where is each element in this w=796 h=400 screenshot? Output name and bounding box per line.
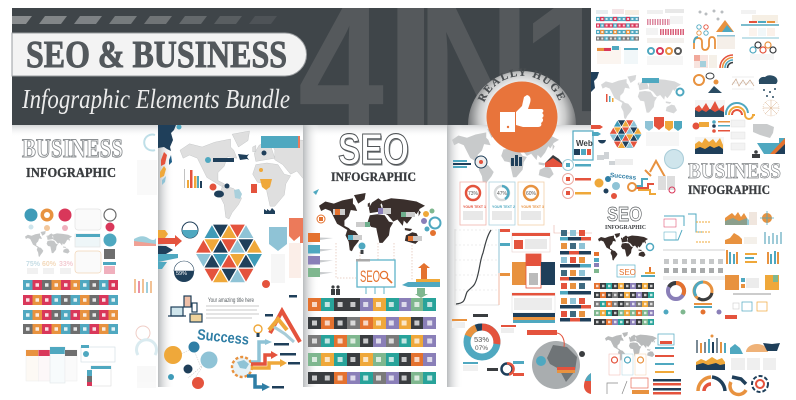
area chart xyxy=(696,357,725,370)
panel: right bottom right thumbnail xyxy=(696,334,780,395)
heading: INFOGRAPHIC: INFOGRAPHIC xyxy=(331,169,416,184)
thumb icon xyxy=(500,95,544,132)
donut labels xyxy=(452,314,516,371)
panel: faded edge of second sheet xyxy=(134,134,157,388)
process chips xyxy=(725,293,771,319)
panel: right thumbnail strip top xyxy=(596,9,779,68)
devices xyxy=(597,152,633,165)
factory icon xyxy=(264,208,275,214)
panel: right process thumbnails xyxy=(663,211,782,319)
donut chart: 53% xyxy=(474,335,489,344)
donut pair xyxy=(668,282,712,300)
note box xyxy=(81,345,115,362)
SEO sign board: SEO xyxy=(360,267,380,286)
network xyxy=(594,176,620,199)
heading: BUSINESS: BUSINESS xyxy=(688,158,781,183)
icon tile grid xyxy=(594,283,654,325)
world map xyxy=(180,130,303,220)
colour arrows xyxy=(402,263,440,298)
panel: map and hexagon sheet xyxy=(158,125,303,391)
icon strip rows xyxy=(23,280,118,334)
process diagram xyxy=(664,214,710,242)
globe with arrows xyxy=(232,339,300,391)
list icons xyxy=(655,347,674,373)
triangle arrows xyxy=(265,295,300,342)
gear cluster xyxy=(646,244,654,250)
icon columns xyxy=(560,230,591,322)
web box xyxy=(573,131,593,160)
donut legend xyxy=(664,303,722,314)
red corner globe xyxy=(584,373,591,394)
people silhouettes xyxy=(331,285,340,295)
panel: header banner xyxy=(12,8,591,125)
rainbow arc xyxy=(726,103,755,119)
thumb 1 icon rows xyxy=(596,9,639,64)
web box xyxy=(658,334,674,345)
ring caption path xyxy=(483,76,561,107)
arrow cluster xyxy=(628,179,656,194)
stacked bar chart xyxy=(695,100,725,117)
gear cluster xyxy=(421,208,440,236)
hexagon of triangles xyxy=(195,224,263,283)
round badges xyxy=(174,222,198,282)
line chart xyxy=(455,229,510,305)
flow and tiles xyxy=(607,378,681,394)
area chart xyxy=(695,137,724,154)
subtitle: Infographic Elements Bundle xyxy=(21,84,290,114)
big 4IN1 text xyxy=(300,8,591,125)
bar chart xyxy=(184,169,202,188)
percent stats: 60% xyxy=(42,261,57,268)
globe icons xyxy=(24,208,72,231)
banner drop shadow xyxy=(12,125,591,137)
map pin callouts xyxy=(205,136,300,199)
ring on map xyxy=(676,88,684,96)
map pins xyxy=(313,189,366,254)
area chart second row xyxy=(725,232,782,244)
badge: really huge thumbs up xyxy=(468,68,576,152)
heading: Success: Success xyxy=(196,326,250,349)
ring stat cards: YOUR TEXT 1 xyxy=(463,205,486,209)
ring stat cards: 60% xyxy=(526,191,537,197)
SEO sign: SEO xyxy=(619,268,636,277)
banner background xyxy=(12,8,591,125)
panel: charts sheet xyxy=(447,125,593,394)
arrows xyxy=(591,125,606,144)
donut chart xyxy=(467,327,497,357)
badge ring xyxy=(468,71,576,125)
ring stat cards: YOUR TEXT 3 xyxy=(521,205,544,209)
option tiles xyxy=(725,275,779,290)
body text lines xyxy=(206,305,259,319)
heading: INFOGRAPHIC: INFOGRAPHIC xyxy=(26,165,116,180)
semi-circle infographics xyxy=(730,343,780,370)
thumb 3 curves xyxy=(694,10,735,68)
panel: right thumbnail map and hexagon copy xyxy=(591,72,684,199)
grey map xyxy=(452,127,559,186)
top row icons xyxy=(694,73,777,98)
left arrows xyxy=(158,230,182,269)
mini table xyxy=(87,366,111,386)
dark map xyxy=(598,233,648,260)
ribbons xyxy=(645,117,682,146)
thumb 4 timelines xyxy=(741,10,779,60)
ring stat cards: 73% xyxy=(468,191,479,197)
sheet shadow xyxy=(447,125,463,387)
sheet shadow xyxy=(303,125,319,387)
map corner splash xyxy=(158,124,182,185)
grey map xyxy=(605,332,657,361)
lightbulb icon xyxy=(254,325,262,337)
round badges: 59% xyxy=(176,271,187,277)
success label: Success xyxy=(610,172,637,182)
tile rows xyxy=(663,249,725,280)
list icons xyxy=(692,120,745,150)
ring stat cards: YOUR TEXT 2 xyxy=(492,205,515,209)
arrows xyxy=(641,267,655,277)
bars xyxy=(606,94,614,102)
mini hexagon xyxy=(609,120,642,148)
text cards xyxy=(75,209,101,273)
thumb 2 bars xyxy=(646,9,684,65)
ring cards xyxy=(609,354,646,375)
panel: right SEO thumbnail xyxy=(594,204,655,325)
panel: SEO sheet xyxy=(303,125,440,387)
ring caption: REALLY HUGE xyxy=(478,68,566,102)
side icons xyxy=(103,209,116,274)
sheet shadow xyxy=(158,125,174,387)
map callouts xyxy=(453,155,562,168)
title: SEO & BUSINESS: SEO & BUSINESS xyxy=(26,34,287,76)
bar charts third row xyxy=(726,250,779,264)
heading: BUSINESS: BUSINESS xyxy=(22,134,123,163)
donut chart: 07% xyxy=(475,345,488,352)
circles network xyxy=(164,342,218,389)
panel: business infographic sheet xyxy=(22,134,123,386)
half donut arcs xyxy=(698,376,768,395)
side circles xyxy=(562,160,591,198)
SEO sign board xyxy=(356,259,395,294)
bar chart xyxy=(696,334,726,353)
dashed connector lines xyxy=(336,243,412,280)
percent stats: 33% xyxy=(59,261,74,268)
grey map xyxy=(601,75,681,119)
map label tags xyxy=(333,208,422,241)
small donut xyxy=(487,361,524,376)
ring stat cards: 47% xyxy=(497,191,508,197)
heading: SEO: SEO xyxy=(338,125,409,174)
body heading: Your amazing title here xyxy=(208,297,254,304)
web box: Web xyxy=(576,139,593,148)
percent stats xyxy=(26,261,74,274)
mini stats xyxy=(658,176,675,193)
side ribbons xyxy=(262,218,303,288)
title pill xyxy=(12,33,306,76)
dash stripe xyxy=(12,16,277,24)
heading: SEO: SEO xyxy=(607,204,642,226)
icon tile grid xyxy=(308,298,436,384)
devices illustration xyxy=(168,296,202,322)
percent stats: 75% xyxy=(26,261,41,268)
radial burst xyxy=(763,100,779,116)
dark world map xyxy=(319,193,425,251)
teal card header xyxy=(76,234,100,237)
left tags xyxy=(594,252,599,273)
presenter banner xyxy=(752,138,785,158)
panel: right business charts thumbnail xyxy=(688,73,785,197)
corner splash xyxy=(591,72,599,92)
heading: INFOGRAPHIC: INFOGRAPHIC xyxy=(688,183,770,197)
grey globe xyxy=(527,330,585,389)
heading: SEO: SEO xyxy=(339,126,410,176)
triangle arrows xyxy=(645,161,665,177)
blue callout xyxy=(642,78,659,83)
dark area layer xyxy=(696,363,725,370)
panel: right bottom left thumbnail xyxy=(605,332,681,394)
small world map xyxy=(25,231,72,257)
round stamp xyxy=(664,150,684,168)
orange disc xyxy=(486,82,558,152)
pricing tables xyxy=(26,347,77,383)
left rows of map labels xyxy=(308,233,333,277)
flow boxes xyxy=(512,225,592,323)
USA map xyxy=(753,124,774,138)
heading: INFOGRAPHIC: INFOGRAPHIC xyxy=(605,224,646,231)
area chart cluster xyxy=(725,211,774,225)
ring stat cards xyxy=(460,182,544,225)
